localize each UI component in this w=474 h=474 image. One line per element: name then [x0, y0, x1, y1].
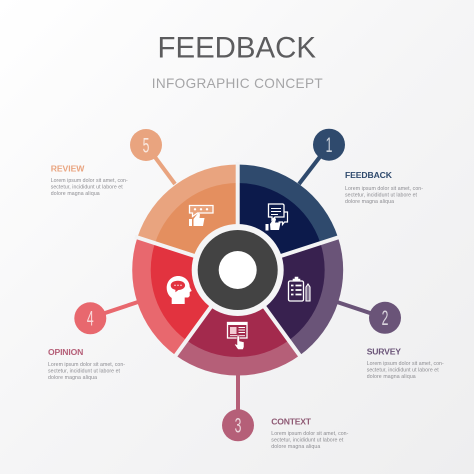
label: survey: Lorem ipsum dolor sit amet, con- [367, 361, 444, 367]
number node 4: 4 [87, 306, 94, 331]
segment 2 survey [238, 237, 343, 355]
number node 3 [222, 409, 254, 441]
number node 4 [74, 302, 106, 334]
number node 3: 3 [235, 413, 241, 438]
label: feedback [345, 170, 423, 205]
central hub [192, 224, 284, 316]
label: survey: dolore magna aliqua [367, 374, 416, 380]
number node 2 [369, 302, 401, 334]
number node 5: 5 [143, 133, 149, 157]
subtitle: INFOGRAPHIC CONCEPT [152, 76, 323, 91]
connector: 5 [146, 145, 175, 184]
label: review [51, 164, 128, 197]
title: FEEDBACK [158, 31, 316, 64]
label: review: REVIEW [51, 164, 85, 174]
label: survey [367, 346, 444, 380]
label: opinion: Lorem ipsum dolor sit amet, con- [48, 362, 125, 368]
icon: opinion head with speech bubble [167, 276, 192, 304]
segment 3 context [176, 270, 300, 376]
label: context: CONTEXT [271, 416, 312, 426]
label: feedback: FEEDBACK [345, 170, 393, 180]
label: feedback: dolore magna aliqua [345, 199, 394, 205]
label: feedback: sectetur, incididunt ut labore et [345, 192, 418, 198]
icon: context screen and pointer [228, 322, 247, 350]
label: context: sectetur, incididunt ut labore et [271, 437, 344, 443]
segment 5 review [137, 164, 238, 270]
label: opinion: sectetur, incididunt ut labore et [48, 368, 121, 374]
label: opinion [48, 347, 125, 381]
label: context [271, 416, 349, 450]
label: survey: sectetur, incididunt ut labore et [367, 367, 439, 373]
label: review: Lorem ipsum dolor sit amet, con- [51, 178, 128, 184]
icon: survey clipboard and pencil [288, 277, 310, 301]
icon: review rating and thumb [189, 206, 213, 226]
number node 2: 2 [382, 306, 388, 330]
segment 4 opinion [132, 237, 238, 355]
connector: 2 [337, 302, 385, 318]
label: opinion: dolore magna aliqua [48, 375, 97, 381]
icon: feedback document and thumb [266, 204, 288, 230]
connector: 4 [90, 302, 138, 318]
label: review: sectetur, incididunt ut labore et [51, 184, 123, 190]
pie wheel [132, 162, 343, 376]
connector: 1 [299, 145, 329, 184]
label: opinion: OPINION [48, 347, 83, 357]
connector: 3 [236, 375, 240, 425]
number node 1: 1 [326, 132, 332, 157]
label: context: Lorem ipsum dolor sit amet, con- [271, 431, 349, 437]
label: context: dolore magna aliqua [271, 444, 320, 450]
number node 5 [130, 129, 162, 161]
label: review: dolore magna aliqua [51, 191, 100, 197]
number node 1 [313, 129, 345, 161]
label: survey: SURVEY [367, 346, 401, 356]
label: feedback: Lorem ipsum dolor sit amet, con- [345, 186, 423, 192]
segment 1 feedback [238, 164, 338, 270]
